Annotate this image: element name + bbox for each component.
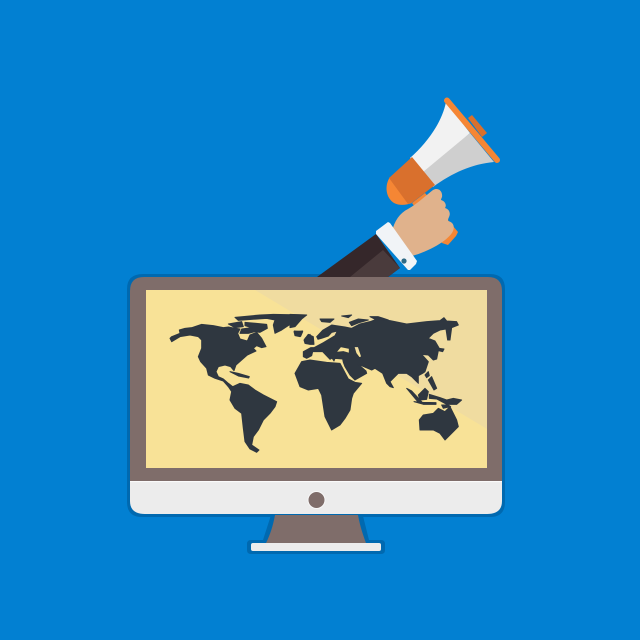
monitor chin [130,481,502,514]
cuff button [401,258,407,264]
megaphone cone light half [410,102,470,174]
megaphone cone shaded half [423,133,494,187]
megaphone rim [447,100,497,160]
megaphone collar [389,157,435,204]
megaphone top button [468,115,487,137]
arm in suit sleeve [317,234,400,277]
monitor base [251,543,381,551]
megaphone handle [412,193,458,245]
hand [392,189,454,256]
monitor power button [308,492,325,508]
screen [146,290,487,468]
monitor stand [266,515,366,543]
shirt cuff [376,222,417,270]
monitor frame [130,277,502,482]
eurasia, africa, australia [290,314,462,440]
world map [170,314,462,452]
screen reflection [255,290,487,429]
monitor [130,277,502,551]
americas and greenland [170,314,314,452]
megaphone [387,100,497,245]
monitor outline [127,274,505,554]
megaphone rear cap [387,177,412,205]
